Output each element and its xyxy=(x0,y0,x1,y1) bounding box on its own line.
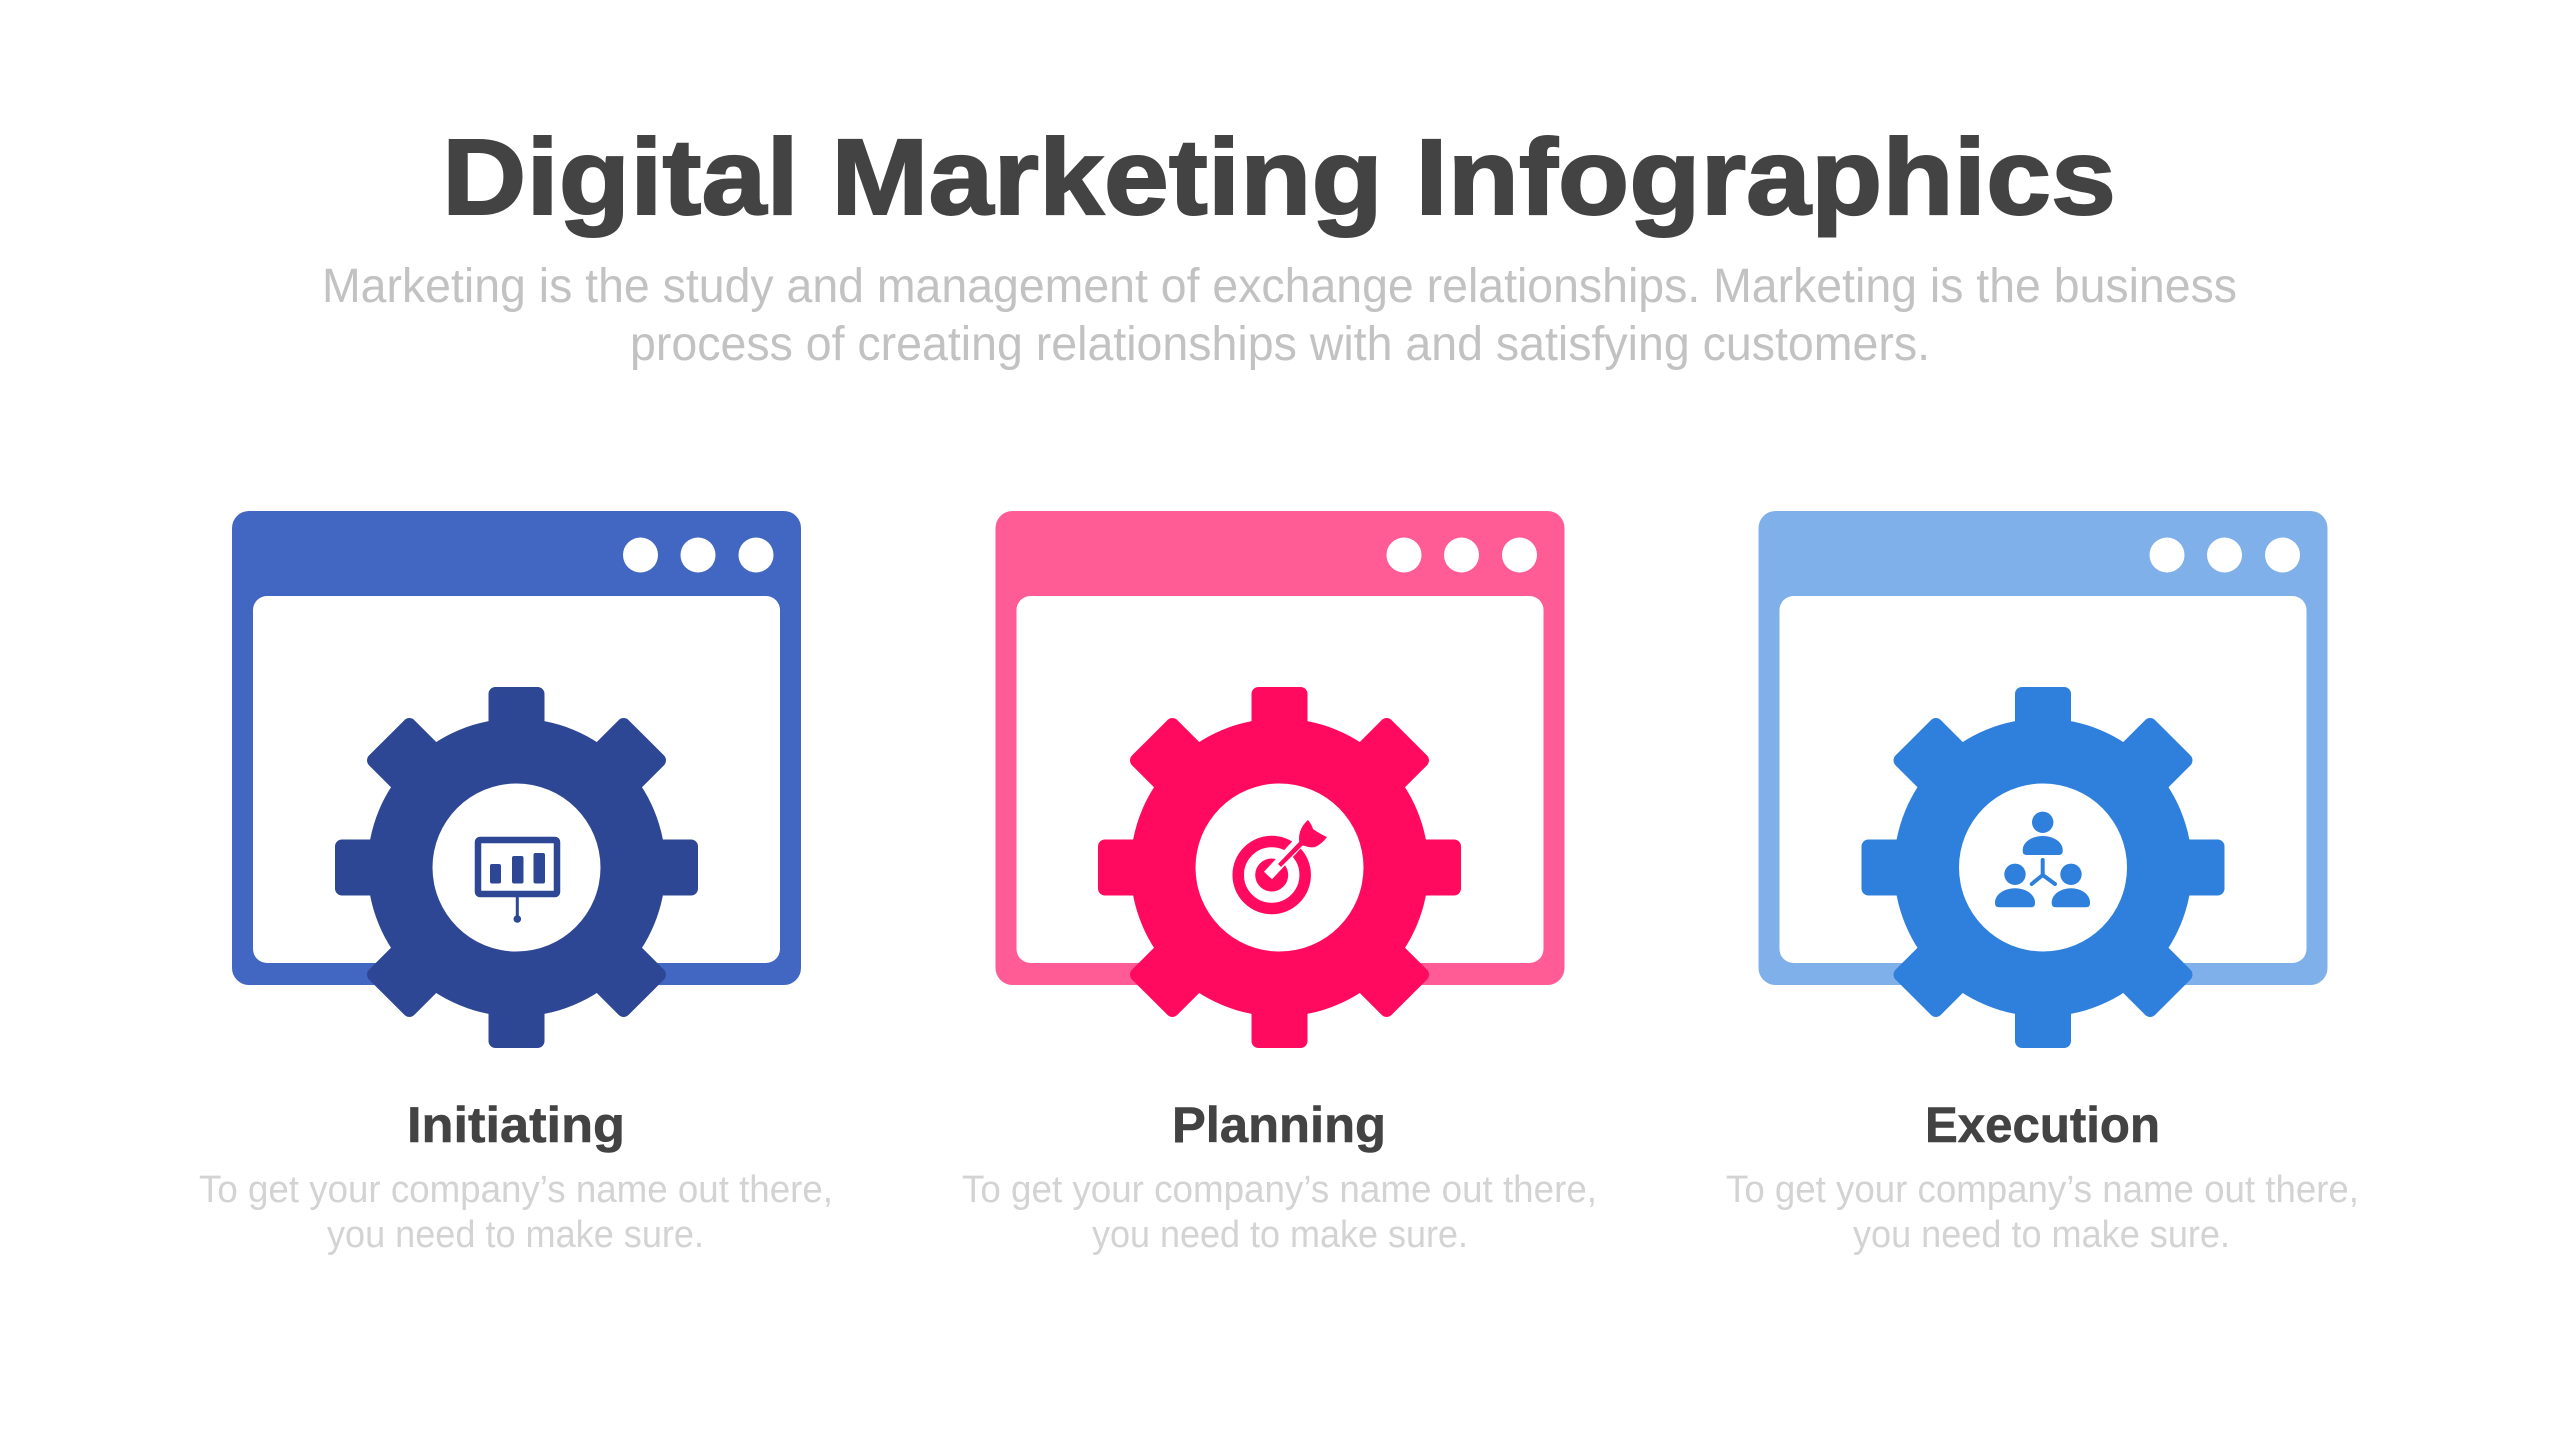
browser window: execution xyxy=(1758,511,2328,985)
gear: execution xyxy=(1862,687,2224,1048)
browser window: planning xyxy=(996,511,1564,985)
subtitle xyxy=(322,260,2237,371)
gear: planning xyxy=(1098,687,1461,1048)
description: execution: you need to make sure. xyxy=(1853,1214,2230,1256)
gear: initiating xyxy=(335,687,698,1048)
description: planning: To get your company’s name out there, xyxy=(962,1169,1597,1211)
description: execution xyxy=(1726,1169,2359,1256)
description: execution: To get your company’s name out there, xyxy=(1726,1169,2359,1211)
title: Digital Marketing Infographics xyxy=(442,116,2116,237)
description: planning: you need to make sure. xyxy=(1092,1214,1468,1256)
subtitle: Marketing is the study and management of exchange relationships. Marketing is the business xyxy=(322,260,2237,313)
panel: execution xyxy=(1726,511,2359,1256)
description: initiating: To get your company’s name out there, xyxy=(199,1169,833,1211)
panel: planning xyxy=(962,511,1597,1256)
browser window: initiating xyxy=(232,511,801,985)
icon: presentation chart xyxy=(478,840,557,923)
panel: initiating xyxy=(199,511,833,1256)
icon: target with dart xyxy=(1238,820,1327,908)
description: initiating xyxy=(199,1169,833,1256)
description: initiating: you need to make sure. xyxy=(327,1214,704,1256)
description: planning xyxy=(962,1169,1597,1256)
subtitle: process of creating relationships with and satisfying customers. xyxy=(630,318,1930,371)
heading: execution: Execution xyxy=(1925,1097,2160,1153)
icon: team hierarchy xyxy=(1995,812,2090,907)
heading: planning: Planning xyxy=(1172,1097,1386,1153)
heading: initiating: Initiating xyxy=(407,1097,625,1153)
